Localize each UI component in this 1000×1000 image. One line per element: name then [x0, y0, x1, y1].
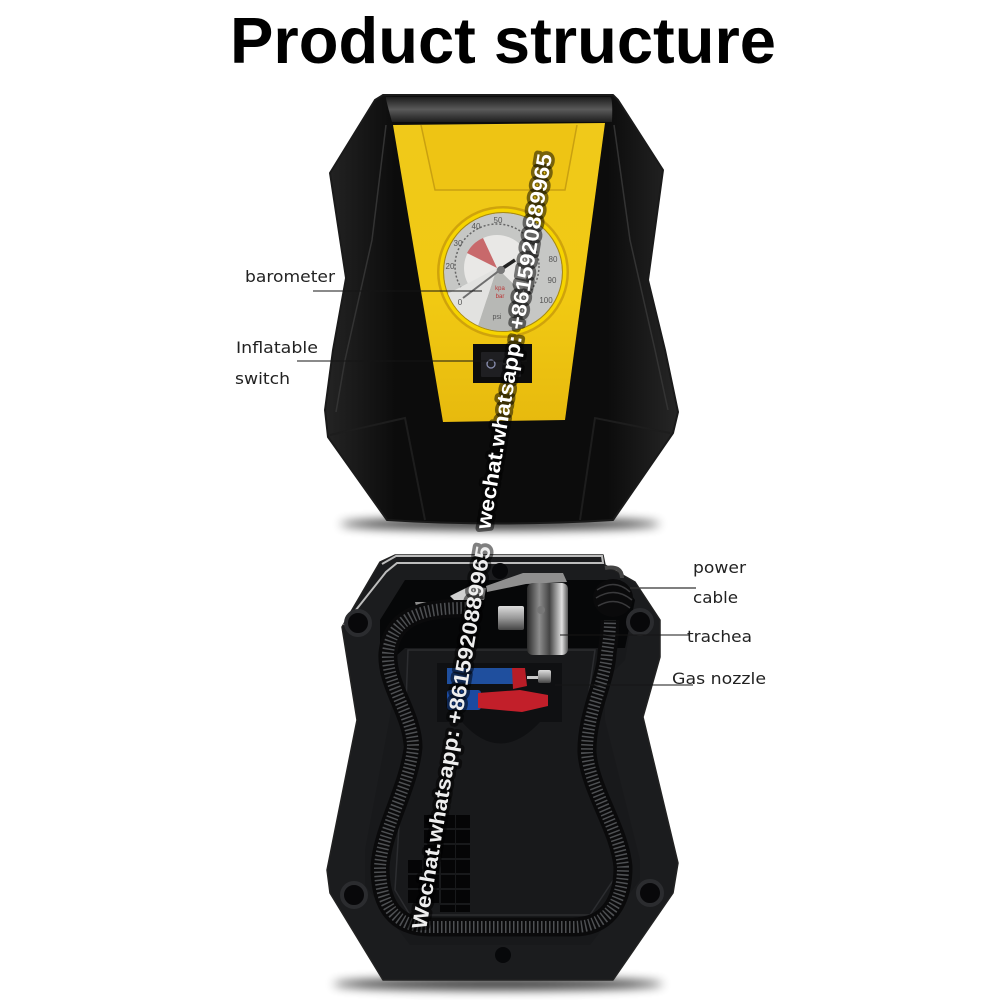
- label: power cable: [630, 558, 746, 607]
- coiled power cable: [593, 567, 633, 617]
- inner cavity: [365, 580, 640, 945]
- barometer gauge: 100: [539, 296, 553, 305]
- label: power cable: cable: [693, 588, 738, 607]
- barometer gauge: bar: [496, 294, 504, 300]
- label: Gas nozzle: Gas nozzle: [672, 669, 766, 688]
- label: barometer: barometer: [245, 267, 335, 286]
- casing: [325, 95, 678, 524]
- label: Inflatable switch: [235, 338, 527, 388]
- blue and red gas nozzles: [447, 668, 551, 712]
- hinge bar: [386, 97, 612, 122]
- barometer gauge: 20: [446, 262, 455, 271]
- barometer gauge: 0: [458, 298, 463, 307]
- barometer gauge: psi: [493, 314, 502, 321]
- rear view of air compressor: [327, 555, 678, 990]
- chrome inflator chuck: [450, 573, 568, 655]
- label: Inflatable switch: Inflatable: [236, 338, 318, 357]
- small metal fitting: [415, 602, 440, 613]
- barometer gauge: kpa: [495, 286, 505, 292]
- watermark: upper contact line: wechat.whatsapp: +8615920889965: [472, 152, 557, 532]
- ground shadow: [340, 518, 660, 530]
- label: power cable: power: [693, 558, 746, 577]
- casing: [327, 555, 678, 980]
- barometer gauge: 80: [549, 255, 558, 264]
- label: trachea: trachea: [687, 627, 752, 646]
- braided air hose: [380, 608, 623, 927]
- title: Product structure: [230, 4, 776, 77]
- barometer gauge: 50: [494, 216, 503, 225]
- yellow face panel: [393, 123, 605, 422]
- front view of air compressor: [325, 95, 678, 530]
- barometer gauge: [437, 206, 569, 338]
- rocker switch: [473, 344, 532, 383]
- barometer gauge: 40: [472, 222, 481, 231]
- vent grid: [408, 815, 470, 912]
- barometer gauge: 30: [454, 239, 463, 248]
- watermark: lower contact line: Wechat.whatsapp: +8615920889965: [408, 544, 496, 931]
- ground shadow: [333, 978, 663, 990]
- corner screw posts: [342, 610, 662, 907]
- barometer gauge: 90: [548, 276, 557, 285]
- label: Inflatable switch: switch: [235, 369, 290, 388]
- nozzle recess: [437, 663, 562, 744]
